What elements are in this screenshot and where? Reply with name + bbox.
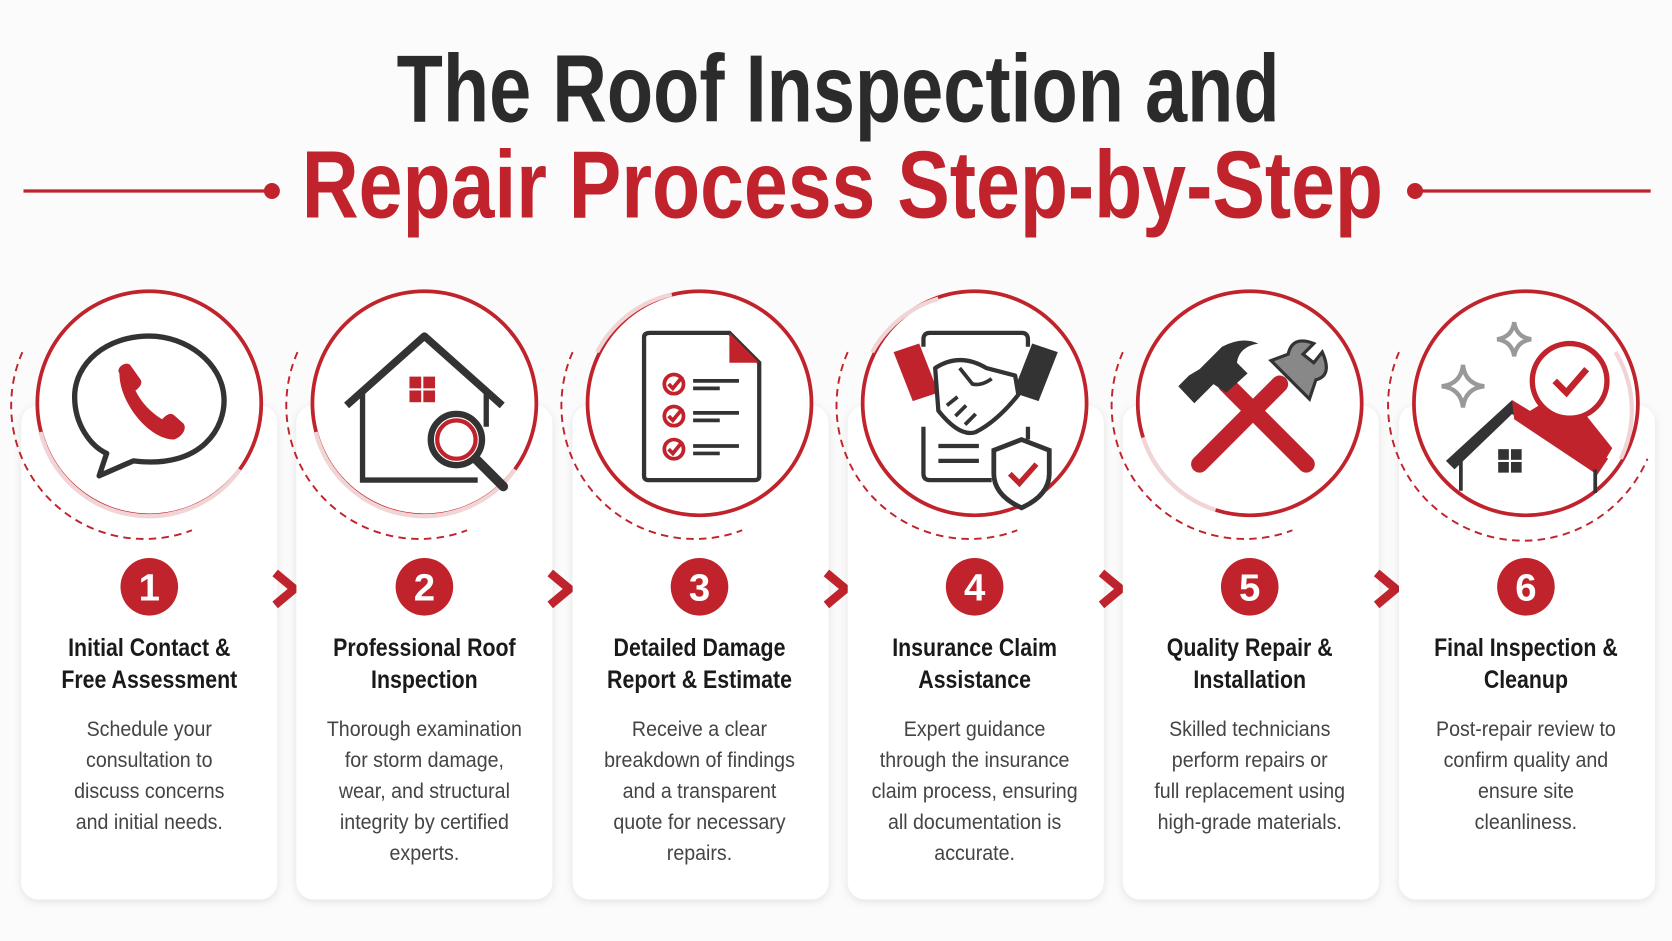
badge 3: 3 xyxy=(689,567,710,610)
icon: house with check and sparkles xyxy=(1442,322,1612,493)
ring 1 xyxy=(11,291,261,539)
text 2: for storm damage, xyxy=(345,748,504,772)
heading 1 xyxy=(61,634,238,693)
arrow 5 xyxy=(1377,573,1396,605)
arrow 2 xyxy=(550,573,569,605)
heading 5: Installation xyxy=(1193,666,1306,693)
heading 3: Report & Estimate xyxy=(607,666,792,693)
text 2: integrity by certified xyxy=(340,810,509,834)
heading 2 xyxy=(333,634,516,693)
text 2 xyxy=(327,717,522,865)
text 2: wear, and structural xyxy=(338,779,510,803)
heading 6: Final Inspection & xyxy=(1434,634,1618,661)
ring 5 xyxy=(1112,291,1362,539)
text 6: cleanliness. xyxy=(1475,810,1577,834)
ring 3 xyxy=(561,291,811,539)
title: Repair Process Step-by-Step xyxy=(302,132,1383,239)
text 3: and a transparent xyxy=(623,779,777,803)
heading 2: Inspection xyxy=(371,666,478,693)
badge 1: 1 xyxy=(139,567,160,610)
text 6: Post-repair review to xyxy=(1436,717,1616,741)
heading 2: Professional Roof xyxy=(333,634,516,661)
heading 3 xyxy=(607,634,792,693)
ring 4 xyxy=(837,291,1087,539)
text 1: and initial needs. xyxy=(76,810,223,834)
badge 1 xyxy=(120,558,178,616)
heading 1: Free Assessment xyxy=(61,666,238,693)
title xyxy=(302,36,1383,239)
card 2 xyxy=(286,291,552,899)
text 2: experts. xyxy=(390,841,459,865)
text 4: claim process, ensuring xyxy=(872,779,1078,803)
badge 6 xyxy=(1497,558,1555,616)
heading 5 xyxy=(1167,634,1333,693)
badge 5 xyxy=(1221,558,1279,616)
text 6 xyxy=(1436,717,1616,834)
text 4: Expert guidance xyxy=(904,717,1045,741)
heading 5: Quality Repair & xyxy=(1167,634,1333,661)
ring 6 xyxy=(1388,291,1647,541)
arrow 3 xyxy=(826,573,846,605)
badge 4: 4 xyxy=(964,567,986,610)
badge 6: 6 xyxy=(1515,567,1537,610)
heading 6 xyxy=(1434,634,1618,693)
text 5 xyxy=(1154,717,1345,834)
text 3: Receive a clear xyxy=(632,717,767,741)
text 5: perform repairs or xyxy=(1172,748,1328,772)
decorative title lines xyxy=(23,185,1651,197)
text 1: Schedule your xyxy=(87,717,212,741)
text 3: quote for necessary xyxy=(613,810,786,834)
badge 2 xyxy=(396,558,453,616)
arrow 1 xyxy=(275,573,294,605)
badge 4 xyxy=(946,558,1003,616)
heading 4 xyxy=(892,634,1057,693)
text 1: consultation to xyxy=(86,748,213,772)
card 4 xyxy=(837,291,1104,899)
text 1: discuss concerns xyxy=(74,779,224,803)
text 3 xyxy=(604,717,795,865)
heading 3: Detailed Damage xyxy=(614,634,785,661)
text 2: Thorough examination xyxy=(327,717,522,741)
icon: phone bubble xyxy=(75,336,224,476)
title: The Roof Inspection and xyxy=(397,36,1280,143)
ring 2 xyxy=(286,291,536,539)
badge 3 xyxy=(671,558,728,616)
text 5: full replacement using xyxy=(1154,779,1345,803)
heading 1: Initial Contact & xyxy=(68,634,230,661)
text 6: confirm quality and xyxy=(1444,748,1608,772)
text 4 xyxy=(872,717,1078,865)
badge 2: 2 xyxy=(414,567,435,610)
text 4: accurate. xyxy=(934,841,1015,865)
arrow 4 xyxy=(1102,573,1121,605)
text 3: breakdown of findings xyxy=(604,748,795,772)
heading 6: Cleanup xyxy=(1484,666,1568,693)
heading 4: Insurance Claim xyxy=(892,634,1057,661)
text 4: all documentation is xyxy=(888,810,1061,834)
heading 4: Assistance xyxy=(918,666,1031,693)
icon: house magnifier xyxy=(347,336,503,487)
text 1 xyxy=(74,717,224,834)
icon: handshake with document and shield xyxy=(894,333,1058,508)
text 5: high-grade materials. xyxy=(1158,810,1342,834)
text 6: ensure site xyxy=(1478,779,1574,803)
icon: checklist document xyxy=(644,333,759,480)
card 1 xyxy=(11,291,277,899)
badge 5: 5 xyxy=(1239,567,1260,610)
text 4: through the insurance xyxy=(880,748,1069,772)
text 5: Skilled technicians xyxy=(1169,717,1330,741)
card 6 xyxy=(1388,291,1655,899)
card 3 xyxy=(561,291,829,899)
text 3: repairs. xyxy=(667,841,732,865)
icon: hammer and wrench xyxy=(1178,340,1326,464)
card 5 xyxy=(1112,291,1379,899)
